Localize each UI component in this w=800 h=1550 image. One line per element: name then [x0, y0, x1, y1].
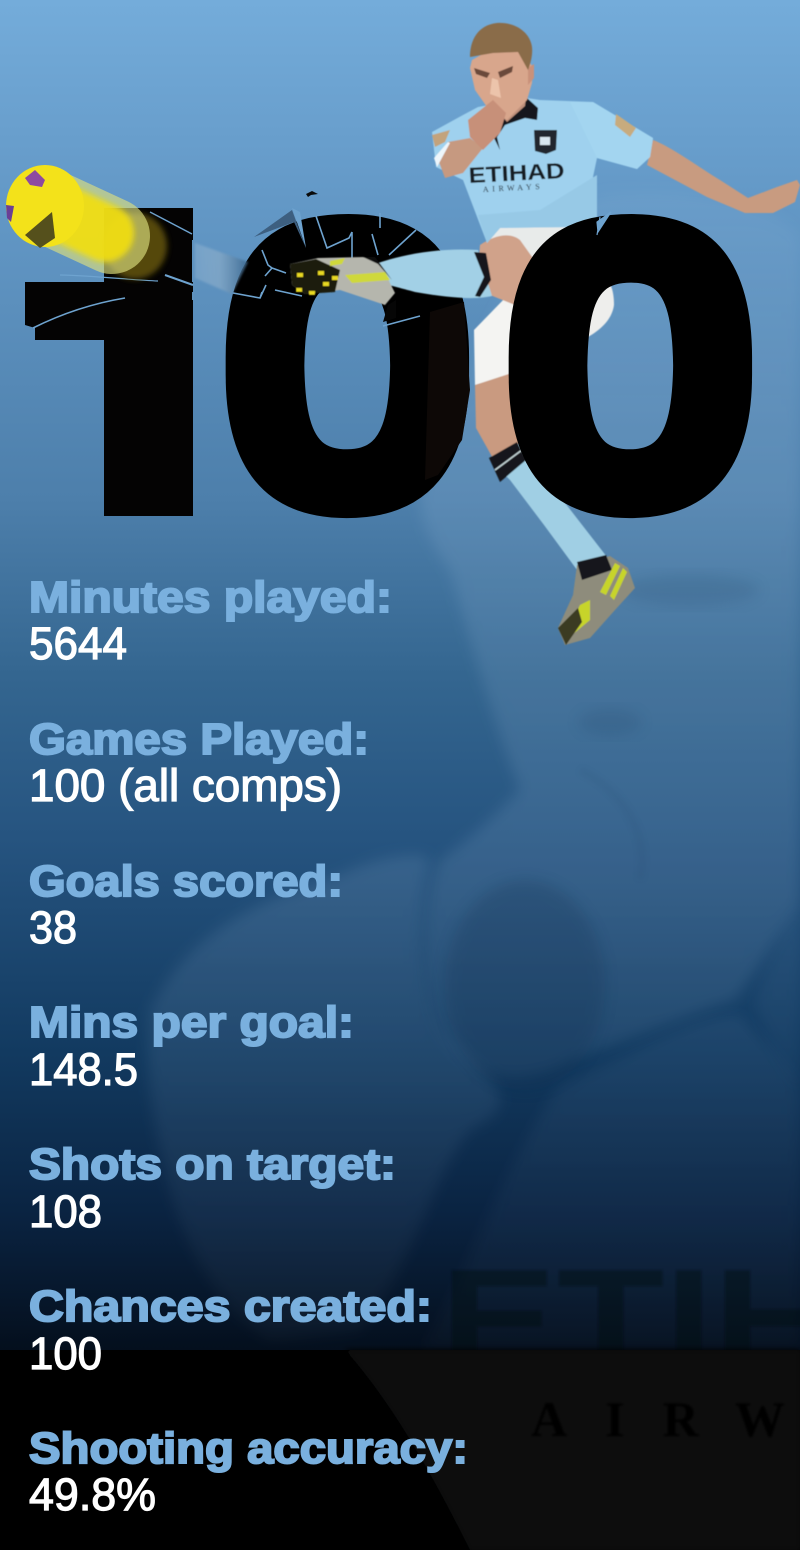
player [290, 23, 800, 645]
stat: goals scored: 38 [29, 902, 77, 953]
digit 0 right, in front of the player: 0 [495, 146, 766, 584]
dark brown shading on right of 0 [425, 302, 470, 480]
stat: games played: Games Played: [29, 715, 369, 764]
ball blur: dark yellow over the number [103, 213, 167, 279]
crack lines [233, 213, 420, 326]
ball blur: pale cylinder [45, 205, 112, 236]
stat: games played: 100 (all comps) [29, 760, 342, 811]
fragments of the broken 1 edge [183, 208, 190, 228]
boot stripes [330, 258, 390, 283]
standing boot [558, 556, 635, 645]
big number 100 [25, 208, 470, 518]
shirt shadow [478, 175, 597, 243]
digit 1: 1 [0, 126, 403, 600]
ball with motion blur [6, 165, 167, 279]
boot yellow stripes [570, 563, 627, 635]
boot collar [577, 555, 612, 580]
white shorts lower [474, 295, 530, 385]
stat: shots on target [29, 1140, 396, 1237]
ghost: fist shadow [445, 880, 605, 1090]
hair [470, 23, 532, 70]
left forearm [437, 138, 483, 178]
ghost: shirt [420, 1015, 800, 1350]
standing sock [490, 442, 607, 574]
shorts upper [487, 224, 597, 300]
crack in right 0 [597, 212, 611, 235]
club badge [534, 130, 557, 154]
small shard [306, 191, 318, 197]
digit 0 left: 0 [212, 146, 483, 584]
stat: shots on target: 108 [29, 1186, 102, 1237]
nose shadow [490, 78, 501, 98]
dim lower shirt [345, 1350, 800, 1550]
sleeve trim [434, 142, 450, 167]
ball blur: yellow core [45, 205, 105, 233]
stat: goals scored: Goals scored: [29, 857, 343, 906]
boot ankle [363, 257, 392, 280]
ghost: finger crease [580, 770, 642, 880]
kicking sock [375, 250, 492, 298]
ghost: right shoulder [755, 905, 800, 1090]
league patch right [615, 114, 636, 137]
stat: minutes played: Minutes played: [29, 573, 392, 622]
stat: shooting accuracy: Shooting accuracy: [29, 1424, 468, 1473]
boot sole [290, 259, 340, 294]
stat: mins per goal: Mins per goal: [29, 998, 354, 1047]
boot sole [558, 608, 582, 645]
blue wedge [292, 208, 306, 248]
stat: mins per goal [29, 998, 354, 1095]
right arm [647, 140, 800, 213]
shirt light sleeve [570, 102, 653, 169]
ball [6, 165, 84, 247]
boot studs [296, 271, 338, 295]
stat: goals scored [29, 857, 343, 953]
stat: minutes played [29, 573, 392, 669]
shatter cracks in the 1 [33, 212, 193, 328]
shirt [432, 98, 653, 243]
flying fragment [254, 210, 306, 248]
ghost: shirt sponsor name: ETIH [440, 1240, 800, 1399]
eyes brows [474, 66, 513, 78]
digit 1 [25, 208, 193, 516]
ghost: forearm and sleeve [148, 855, 500, 1340]
shatter marks in the first 0 [233, 191, 470, 480]
ghosted close-up of the player [148, 192, 800, 1399]
shirt sponsor small: AIRWAYS [483, 182, 544, 194]
ear [528, 64, 534, 85]
shirt sponsor: ETIHAD [468, 158, 565, 188]
sock band [489, 442, 526, 482]
fist [468, 100, 506, 150]
standing thigh [475, 372, 530, 462]
kicking boot [290, 257, 395, 305]
neck [488, 90, 527, 122]
ball: dark patches [25, 212, 55, 248]
ball: purple mark [25, 170, 45, 187]
stat: shooting accuracy [29, 1424, 468, 1520]
ghost: nostril shadow [578, 708, 642, 736]
ghost: eye shadow [620, 574, 760, 606]
stat: chances created: Chances created: [29, 1282, 432, 1331]
stat: shots on target: Shots on target: [29, 1140, 396, 1189]
stat: games played [29, 715, 369, 811]
ghost: face and fist [420, 192, 800, 1077]
translucent ball trail [195, 243, 248, 294]
black shard in the counter [383, 300, 396, 322]
shorts visible in counter [588, 275, 614, 337]
league patch left [432, 130, 450, 147]
stat: chances created: 100 [29, 1328, 102, 1379]
face [470, 50, 533, 120]
collar [490, 98, 538, 150]
stat: shooting accuracy: 49.8% [29, 1469, 156, 1520]
sock band kicking [474, 252, 491, 297]
black floor band [0, 1350, 800, 1550]
kicking thigh [476, 235, 540, 305]
stat: mins per goal: 148.5 [29, 1044, 138, 1095]
stat: minutes played: 5644 [29, 618, 127, 669]
stat: chances created [29, 1282, 432, 1379]
